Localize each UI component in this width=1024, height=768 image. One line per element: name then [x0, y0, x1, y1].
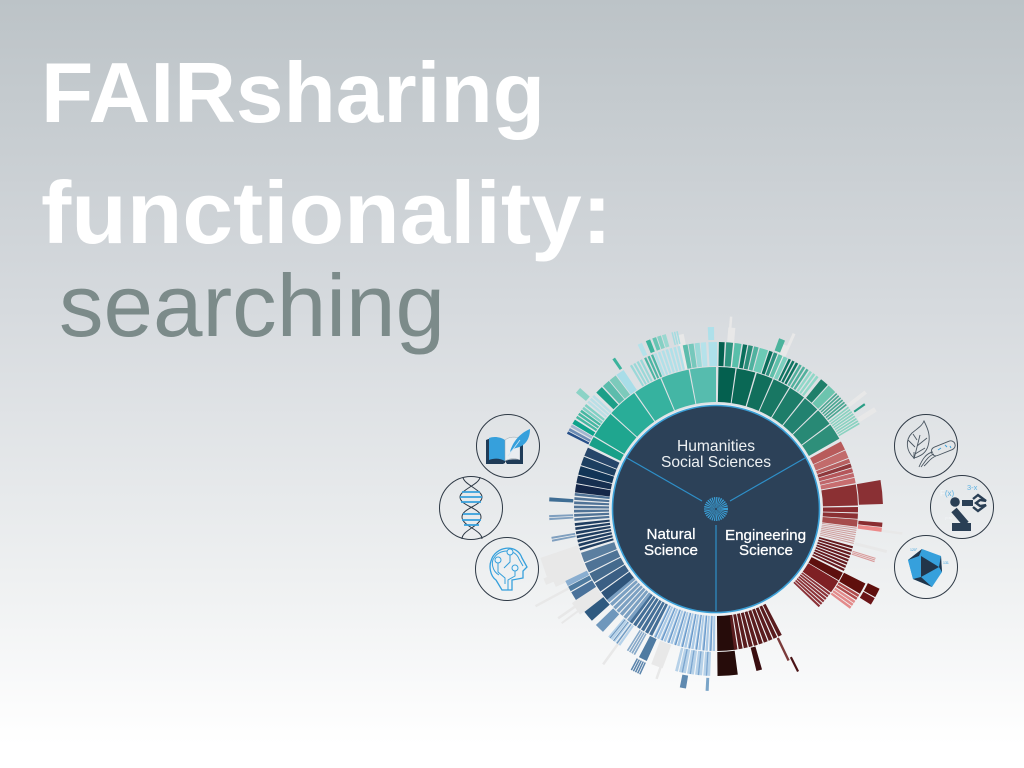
- icon: polyhedron: [894, 536, 958, 598]
- chart: sunburst of disciplines: [469, 262, 963, 756]
- title: functionality: functionality:: [41, 163, 612, 262]
- icon: polyhedron: 131: [943, 561, 949, 565]
- red ring: engineering science: [477, 270, 955, 748]
- icon: circuit head: [476, 538, 538, 600]
- icon: polyhedron: 120°: [910, 548, 918, 552]
- subtitle: searching: searching: [59, 256, 445, 355]
- title: FAIRsharing: FAIRsharing: [41, 46, 545, 141]
- blue ring: natural science: [484, 277, 948, 741]
- icon: robot arm: y=ax: [945, 516, 953, 520]
- label: science: Science: [739, 542, 793, 559]
- label: natural: Natural: [647, 526, 695, 543]
- icon: leaf and bacterium: [894, 414, 958, 478]
- icon: robot arm: [930, 476, 994, 538]
- label: engineering: Engineering: [725, 527, 806, 544]
- centre burst: [710, 502, 722, 516]
- icon: book and feather: [476, 414, 540, 478]
- green ring: humanities and social sciences: [469, 262, 963, 756]
- grey background spikes: [536, 317, 902, 679]
- label: science: Science: [644, 542, 698, 559]
- icon: robot arm: F(x): [940, 489, 955, 498]
- icon: robot arm: 3-x: [967, 483, 978, 492]
- label: social sciences: Social Sciences: [661, 454, 771, 471]
- centre disc: [611, 404, 821, 614]
- label: humanities: Humanities: [677, 438, 755, 455]
- icon: DNA helix: [440, 476, 502, 540]
